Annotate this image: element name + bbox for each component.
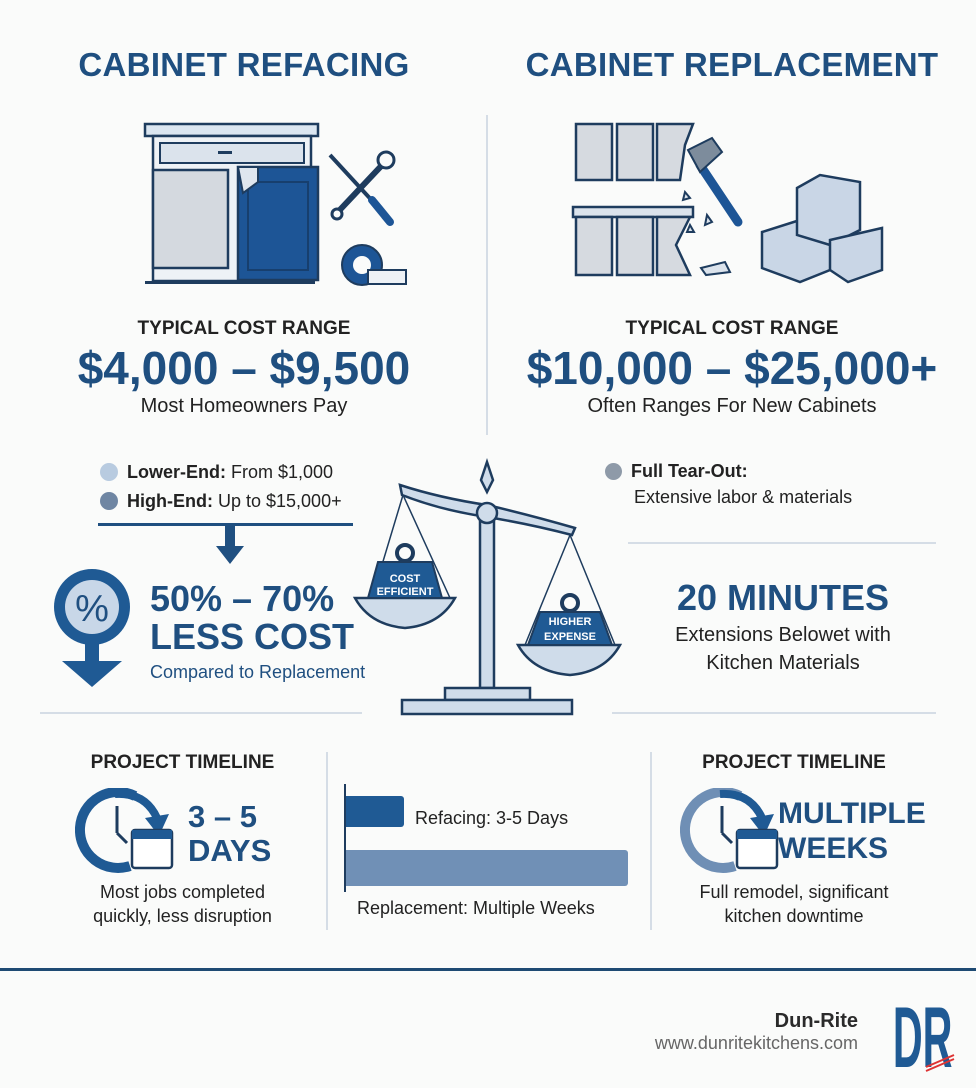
multiple weeks bbox=[778, 797, 926, 865]
text bbox=[93, 882, 272, 926]
vertical divider top bbox=[486, 115, 488, 435]
footer brand: Dun-Rite bbox=[775, 1010, 858, 1032]
text bbox=[699, 882, 889, 926]
multiple weeks: WEEKS bbox=[778, 832, 888, 865]
icon: clock calendar right bbox=[680, 788, 778, 873]
icon: percent pin: % bbox=[75, 588, 109, 630]
savings text: LESS COST bbox=[150, 616, 354, 657]
right bullet: full tear-out: Full Tear-Out: bbox=[631, 461, 748, 481]
scale illustration bbox=[352, 458, 622, 716]
price: $10,000 – $25,000+ bbox=[527, 342, 937, 394]
scale illustration: COST bbox=[390, 573, 421, 585]
label replacement: Replacement: Multiple Weeks bbox=[357, 898, 595, 918]
scale illustration: EFFICIENT bbox=[377, 586, 434, 598]
right bullet: full tear-out bbox=[605, 461, 852, 507]
footer brand bbox=[654, 1010, 858, 1053]
savings text bbox=[150, 578, 365, 682]
sub: Most Homeowners Pay bbox=[141, 395, 347, 417]
arrow down from line bbox=[98, 523, 353, 564]
days bbox=[188, 799, 271, 868]
bullets left bbox=[100, 462, 342, 511]
scale illustration: EXPENSE bbox=[544, 631, 596, 643]
label: TYPICAL COST RANGE bbox=[138, 318, 350, 339]
title: cabinet replacement: CABINET REPLACEMENT bbox=[526, 46, 938, 83]
timeline right: PROJECT TIMELINE bbox=[702, 752, 886, 773]
text: quickly, less disruption bbox=[93, 906, 272, 926]
timeline left: PROJECT TIMELINE bbox=[91, 752, 274, 773]
days: DAYS bbox=[188, 833, 271, 868]
savings text: 50% – 70% bbox=[150, 578, 334, 619]
illustration: replacement demolition and new boxes bbox=[572, 122, 884, 284]
price: $4,000 – $9,500 bbox=[78, 342, 410, 394]
bullets left: High-End: Up to $15,000+ bbox=[127, 491, 342, 511]
20 minutes block: Kitchen Materials bbox=[706, 652, 860, 674]
title: cabinet refacing: CABINET REFACING bbox=[78, 46, 410, 83]
right bullet: full tear-out: Extensive labor & materials bbox=[634, 487, 852, 507]
savings text: Compared to Replacement bbox=[150, 662, 365, 682]
20 minutes block bbox=[675, 577, 891, 674]
illustration: refacing cabinet with tools bbox=[144, 122, 407, 286]
text: Full remodel, significant bbox=[699, 882, 889, 902]
text: Most jobs completed bbox=[100, 882, 265, 902]
bar chart bbox=[344, 784, 628, 892]
icon: clock calendar left bbox=[75, 788, 174, 873]
bar: refacing bbox=[346, 796, 404, 827]
bullets left: Lower-End: From $1,000 bbox=[127, 462, 333, 482]
label: TYPICAL COST RANGE bbox=[626, 318, 838, 339]
right cost block bbox=[527, 318, 937, 417]
scale illustration: HIGHER bbox=[549, 616, 591, 628]
left cost block bbox=[78, 318, 410, 417]
20 minutes block: Extensions Belowet with bbox=[675, 624, 891, 646]
20 minutes block: 20 MINUTES bbox=[677, 577, 889, 618]
days: 3 – 5 bbox=[188, 799, 257, 834]
footer brand: www.dunritekitchens.com bbox=[655, 1033, 858, 1053]
label refacing: Refacing: 3-5 Days bbox=[415, 808, 568, 828]
multiple weeks: MULTIPLE bbox=[778, 797, 926, 830]
sub: Often Ranges For New Cabinets bbox=[587, 395, 877, 417]
text: kitchen downtime bbox=[724, 906, 864, 926]
bar: replacement bbox=[346, 850, 628, 886]
icon: percent pin bbox=[54, 569, 130, 687]
